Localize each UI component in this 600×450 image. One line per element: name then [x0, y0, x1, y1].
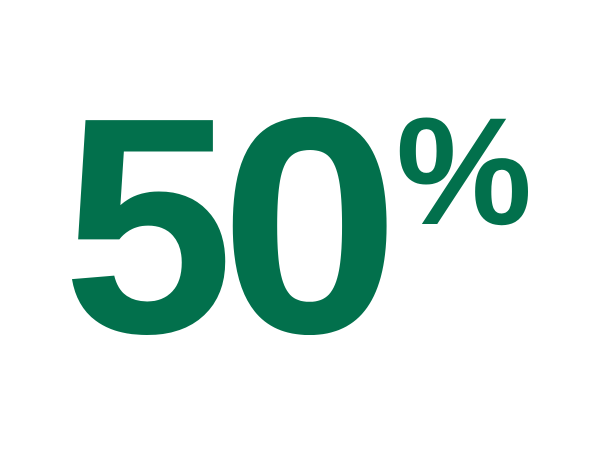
digit 5: 5: [62, 54, 234, 398]
digit 0: 0: [220, 53, 400, 397]
percent sign: %: [396, 86, 532, 257]
